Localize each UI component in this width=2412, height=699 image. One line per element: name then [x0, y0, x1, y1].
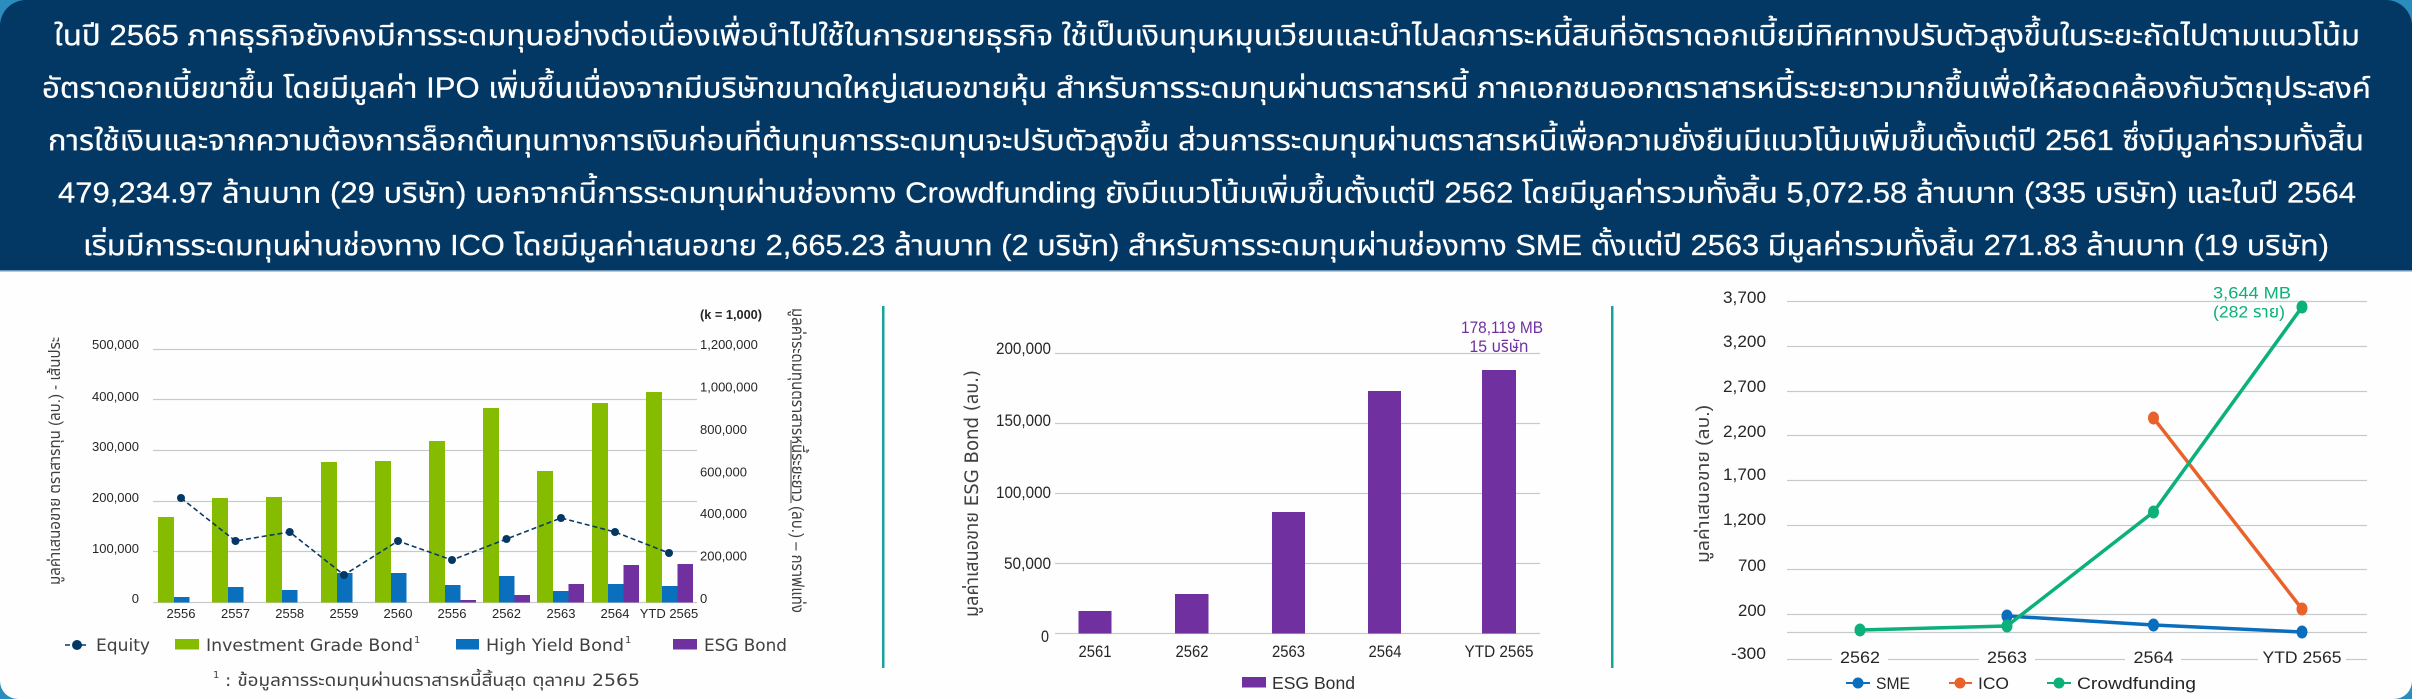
legend: combined chart: ESG Bond — [704, 636, 787, 656]
left axis values — [92, 337, 139, 606]
x axis years — [1078, 642, 1534, 661]
x axis years: 2561 — [1078, 642, 1112, 661]
bars: high yield bond — [174, 573, 678, 602]
legend: combined chart — [65, 635, 787, 656]
y axis values: 0 — [1041, 627, 1049, 646]
callout: ESG value: 15 บริษัท — [1470, 337, 1528, 356]
legend: combined chart: 1 — [625, 635, 631, 646]
summary text: อัตราดอกเบี้ยขาขึ้น โดยมีมูลค่า IPO เพิ่มขึ้นเนื่องจากมีบริษัทขนาดใหญ่เสนอขายหุ้น สำหรับการระดมทุนผ่านตราสารหนี้ ภาคเอกชนออกตราสารหนี้ระยะยาวมากขึ้นเพื่อให้สอดคล้องกับวัตถุประสงค์ — [42, 68, 2371, 106]
x axis years: 2560 — [384, 606, 412, 621]
right axis values: 400,000 — [700, 506, 747, 521]
x axis years: 2562 — [492, 606, 521, 621]
summary text — [42, 15, 2371, 263]
bars: ESG bond — [460, 564, 693, 602]
right axis values: (k = 1,000) — [700, 307, 762, 322]
left axis values: 200,000 — [92, 490, 139, 505]
x axis years — [167, 606, 698, 621]
x axis years: 2559 — [330, 606, 358, 621]
y axis values: 50,000 — [1004, 554, 1051, 573]
legend: combined chart: Equity — [96, 636, 150, 656]
x axis years: 2556 — [438, 606, 466, 621]
divider: left teal rule — [882, 306, 884, 668]
y axis values: -300 — [1731, 644, 1766, 663]
y axis values: 3,200 — [1723, 332, 1766, 351]
summary text: 479,234.97 ล้านบาท (29 บริษัท) นอกจากนี้การระดมทุนผ่านช่องทาง Crowdfunding ยังมีแนวโน้มเพิ่มขึ้นตั้งแต่ปี 2562 โดยมีมูลค่ารวมทั้งสิ้น 5,072.58 ล้านบาท (335 บริษัท) และในปี 2564 — [58, 172, 2356, 210]
x axis years: 2564 — [1368, 642, 1402, 661]
footnote: 1 — [213, 670, 219, 681]
left axis values: 400,000 — [92, 389, 139, 404]
divider: right teal rule — [1611, 306, 1614, 668]
callout: crowdfunding value — [2213, 284, 2291, 322]
panel: alternative funding line chart — [1693, 284, 2367, 693]
callout: crowdfunding value: 3,644 MB — [2213, 284, 2291, 302]
line: ICO — [2148, 412, 2308, 616]
panel: combined equity and bond chart — [46, 307, 810, 692]
left axis title: มูลค่าเสนอขาย ตราสารทุน (ลบ.) - เส้นประ — [46, 337, 64, 585]
callout: crowdfunding value: (282 ราย) — [2213, 304, 2285, 322]
y axis values: 1,700 — [1723, 465, 1766, 484]
x axis years: YTD 2565 — [2262, 648, 2342, 667]
left axis values: 500,000 — [92, 337, 139, 352]
x axis years: 2562 — [1176, 642, 1208, 661]
y axis values: 700 — [1738, 556, 1766, 575]
right axis values: 1,000,000 — [700, 380, 758, 394]
callout: ESG value — [1461, 318, 1543, 356]
y axis values: 1,200 — [1723, 510, 1766, 529]
x axis years — [1832, 648, 2346, 668]
left axis values: 300,000 — [92, 439, 139, 454]
y axis values: 3,700 — [1723, 288, 1766, 307]
right axis values: 1,200,000 — [700, 337, 758, 352]
x axis years: 2564 — [2134, 648, 2174, 667]
right axis values: 200,000 — [700, 548, 747, 564]
x axis years: 2558 — [275, 606, 304, 621]
right axis values: 0 — [700, 591, 707, 606]
y axis values — [1723, 288, 1766, 663]
y axis values — [996, 339, 1051, 646]
legend: line chart: ICO — [1978, 674, 2009, 693]
x axis years: 2563 — [1272, 642, 1305, 661]
x axis years: 2563 — [1987, 648, 2027, 667]
summary text: ในปี 2565 ภาคธุรกิจยังคงมีการระดมทุนอย่างต่อเนื่องเพื่อนำไปใช้ในการขยายธุรกิจ ใช้เป็นเงินทุนหมุนเวียนและนำไปลดภาระหนี้สินที่อัตราดอกเบี้ยมีทิศทางปรับตัวสูงขึ้นในระยะถัดไปตามแนวโน้ม — [54, 15, 2360, 53]
right axis values: 800,000 — [700, 422, 747, 437]
x axis years: YTD 2565 — [640, 606, 698, 621]
y axis title: มูลค่าเสนอขาย (ลบ.) — [1693, 405, 1715, 563]
bars: investment grade bond — [158, 392, 662, 602]
right axis values — [700, 307, 762, 606]
x axis years: 2556 — [167, 606, 195, 621]
x axis years: 2557 — [221, 606, 250, 621]
line: equity — [177, 494, 673, 579]
y axis values: 100,000 — [996, 483, 1051, 502]
y axis values: 150,000 — [996, 411, 1051, 430]
y axis title: มูลค่าเสนอขาย ESG Bond (ลบ.) — [962, 370, 984, 617]
right axis title: มูลค่าระดมทุนตราสารหนี้ระยะยาว (ลบ.) – กราฟแท่ง — [786, 308, 810, 613]
x axis years: 2562 — [1840, 648, 1880, 667]
header panel — [0, 0, 2412, 272]
left axis values: 100,000 — [92, 541, 139, 556]
summary text: เริ่มมีการระดมทุนผ่านช่องทาง ICO โดยมีมูลค่าเสนอขาย 2,665.23 ล้านบาท (2 บริษัท) สำหรับการระดมทุนผ่านช่องทาง SME ตั้งแต่ปี 2563 มีมูลค่ารวมทั้งสิ้น 271.83 ล้านบาท (19 บริษัท) — [83, 227, 2329, 263]
legend: line chart: SME — [1876, 674, 1910, 693]
line: SME — [2002, 610, 2308, 638]
right axis values: 600,000 — [700, 464, 747, 480]
x axis years: YTD 2565 — [1464, 642, 1534, 661]
bars: ESG bond by year — [1078, 370, 1516, 634]
x axis years: 2564 — [601, 606, 629, 621]
legend: combined chart: 1 — [414, 635, 420, 646]
y axis values: 200 — [1738, 601, 1766, 620]
y axis values: 2,700 — [1723, 377, 1766, 396]
legend: combined chart: Investment Grade Bond — [206, 636, 413, 656]
summary text: การใช้เงินและจากความต้องการล็อกต้นทุนทางการเงินก่อนที่ต้นทุนการระดมทุนจะปรับตัวสูงขึ้น ส่วนการระดมทุนผ่านตราสารหนี้เพื่อความยั่งยืนมีแนวโน้มเพิ่มขึ้นตั้งแต่ปี 2561 ซึ่งมีมูลค่ารวมทั้งสิ้น — [48, 120, 2364, 158]
footnote: : ข้อมูลการระดมทุนผ่านตราสารหนี้สิ้นสุด ตุลาคม 2565 — [225, 668, 640, 692]
left axis values: 0 — [132, 591, 139, 606]
y axis values: 2,200 — [1723, 422, 1766, 441]
line: crowdfunding — [1854, 300, 2308, 636]
callout: ESG value: 178,119 MB — [1461, 318, 1543, 337]
legend: combined chart: High Yield Bond — [486, 636, 624, 656]
legend: line chart — [1846, 674, 2196, 693]
x axis years: 2563 — [547, 606, 575, 621]
legend: ESG chart: ESG Bond — [1272, 673, 1355, 693]
panel: ESG bond chart — [962, 318, 1543, 693]
legend: line chart: Crowdfunding — [2077, 674, 2196, 693]
y axis values: 200,000 — [996, 339, 1051, 358]
